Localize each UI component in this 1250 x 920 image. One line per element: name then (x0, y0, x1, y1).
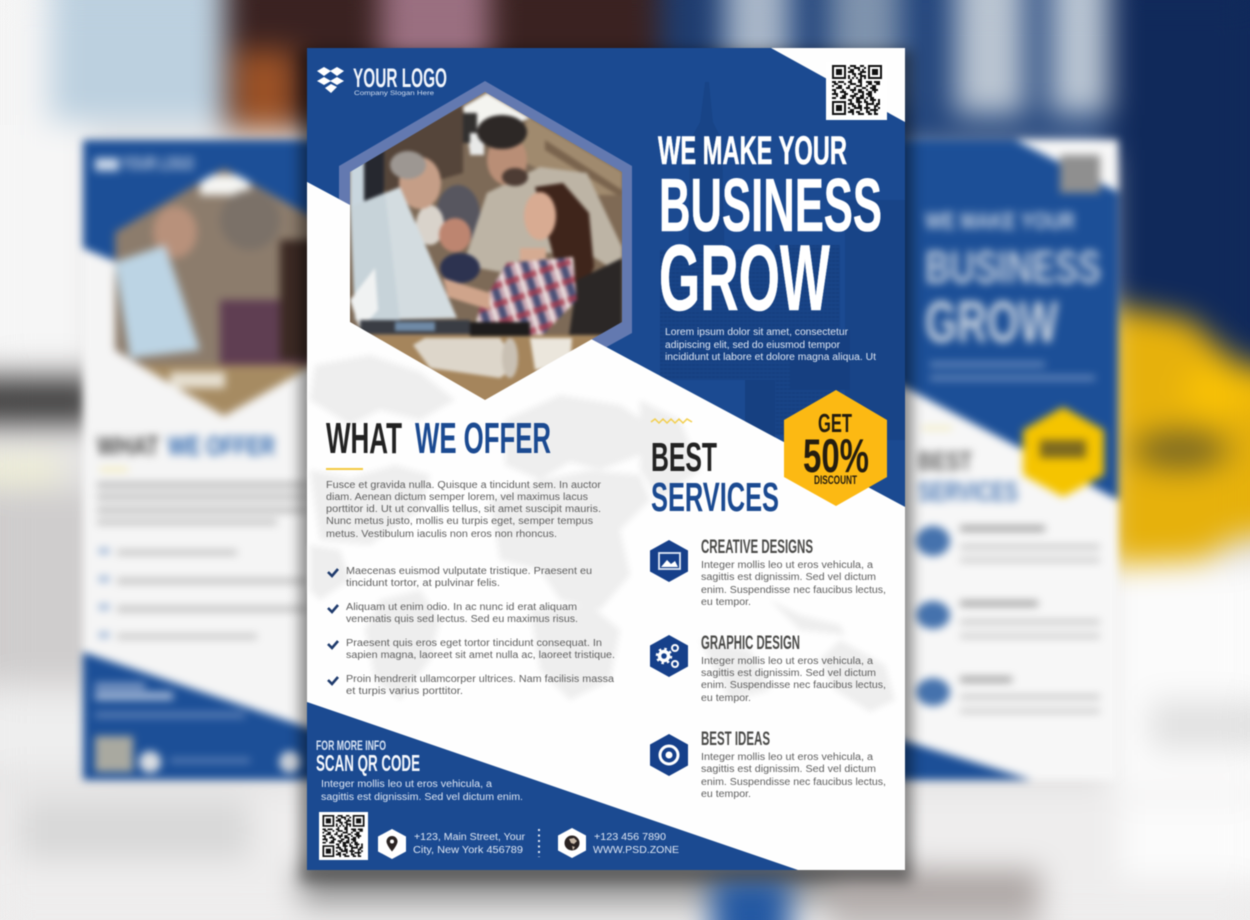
scan QR text: sagittis est dignissim. Sed vel dictum enim. (321, 792, 523, 803)
list item 3: Praesent quis eros eget tortor tincidunt consequat. In (346, 638, 602, 649)
service title: GRAPHIC DESIGN (701, 633, 800, 654)
discount badge (784, 390, 887, 506)
service: best ideas (650, 729, 886, 800)
right blurred flyer: BEST (918, 446, 972, 476)
right blurred flyer: GROW (925, 290, 1058, 355)
service text (701, 560, 886, 608)
headline: BUSINESS (659, 163, 882, 247)
scan QR text: Integer mollis leo ut eros vehicula, a (321, 779, 492, 790)
icon: location pin (378, 829, 406, 859)
list item 3: sapien magna, laoreet sit amet nulla ac, laoreet tristique. (346, 650, 615, 661)
logo slogan: Company Slogan Here (354, 90, 434, 97)
icon: logo box (317, 67, 344, 93)
world map background (310, 355, 895, 712)
bottom blue panel (307, 702, 798, 870)
phone and website (593, 832, 679, 856)
logo (317, 63, 447, 97)
intro paragraph: adipiscing elit, sed do eiusmod tempor (665, 340, 841, 351)
flyer base sheet (307, 48, 905, 870)
address (413, 832, 526, 856)
icon: ring (650, 734, 688, 776)
list item 1: Maecenas euismod vulputate tristique. Praesent eu (346, 566, 592, 577)
white lower panel (307, 182, 905, 870)
service: graphic design (650, 633, 886, 704)
headline: GROW (659, 225, 830, 330)
what we offer paragraph: porttitor id. Ut ut convallis tellus, sit amet suscipit mauris. (326, 504, 601, 515)
intro paragraph: incididunt ut labore et dolore magna aliqua. Ut (665, 352, 876, 363)
bottom QR code (319, 812, 368, 860)
top QR code (826, 62, 887, 120)
contact divider dots (538, 829, 540, 857)
address: +123, Main Street, Your (414, 832, 526, 843)
intro paragraph (665, 327, 876, 363)
service text: eu tempor. (701, 597, 751, 608)
what we offer paragraph (326, 480, 602, 540)
address: City, New York 456789 (413, 845, 523, 856)
scan QR heading: SCAN QR CODE (316, 750, 420, 776)
main flyer (307, 48, 905, 870)
phone and website: +123 456 7890 (594, 832, 666, 843)
list item 2: venenatis quis sed lectus. Sed eu maximus risus. (346, 614, 578, 625)
left blurred flyer: YOUR LOGO (122, 154, 194, 175)
service text: Integer mollis leo ut eros vehicula, a (701, 560, 873, 571)
scan QR heading (316, 737, 420, 776)
headline (658, 129, 882, 330)
intro paragraph: Lorem ipsum dolor sit amet, consectetur (665, 327, 849, 338)
phone and website: WWW.PSD.ZONE (593, 845, 679, 856)
headline: WE MAKE YOUR (658, 129, 847, 173)
discount badge: DISCOUNT (814, 473, 857, 487)
check list (328, 566, 615, 697)
list item 1 (328, 566, 592, 589)
best services heading: SERVICES (651, 474, 779, 520)
what we offer paragraph: metus. Vestibulum iaculis non eros non rhoncus. (326, 529, 557, 540)
what we offer paragraph: diam. Aenean dictum semper lorem, vel maximus lacus (326, 492, 588, 503)
service: creative designs (650, 537, 886, 608)
list item 4: et turpis varius porttitor. (346, 686, 463, 697)
icon: globe (558, 828, 586, 858)
service text: sagittis est dignissim. Sed vel dictum (701, 764, 876, 775)
scan QR heading: FOR MORE INFO (316, 737, 386, 753)
icon: picture (650, 540, 688, 582)
service text: eu tempor. (701, 789, 751, 800)
city skyline texture (660, 82, 905, 450)
list item 4 (328, 674, 614, 697)
right blurred flyer (895, 140, 1118, 780)
scan QR text (321, 779, 523, 803)
blue top panel (307, 48, 905, 507)
right blurred flyer: WE MAKE YOUR (925, 208, 1075, 235)
left blurred flyer: WHAT (97, 431, 159, 461)
what we offer paragraph: Fusce et gravida nulla. Quisque a tincidunt sem. In auctor (326, 480, 602, 491)
left blurred flyer: WE OFFER (168, 431, 275, 461)
main flyer shadow (300, 50, 912, 882)
service text: Integer mollis leo ut eros vehicula, a (701, 656, 873, 667)
best services heading (651, 419, 779, 520)
service text (701, 752, 886, 800)
service text: sagittis est dignissim. Sed vel dictum (701, 572, 876, 583)
logo name: YOUR LOGO (353, 63, 447, 93)
left blurred flyer (83, 140, 345, 780)
what we offer heading: WE OFFER (415, 414, 551, 463)
what we offer heading (326, 414, 551, 470)
list item 2 (328, 602, 578, 625)
what we offer paragraph: Nunc metus justo, mollis eu turpis eget, semper tempus (326, 516, 593, 527)
service text: sagittis est dignissim. Sed vel dictum (701, 668, 876, 679)
right blurred flyer: BUSINESS (925, 241, 1101, 293)
service text: enim. Suspendisse nec faucibus lectus, (701, 777, 886, 788)
service text: Integer mollis leo ut eros vehicula, a (701, 752, 873, 763)
list item 2: Aliquam ut enim odio. In ac nunc id erat aliquam (346, 602, 577, 613)
photo hexagon frame (339, 81, 632, 414)
service title: CREATIVE DESIGNS (701, 537, 813, 558)
service text: enim. Suspendisse nec faucibus lectus, (701, 680, 886, 691)
discount badge: 50% (803, 429, 869, 482)
icon: gears (650, 635, 688, 677)
right blurred flyer: SERVICES (918, 476, 1018, 507)
service text: eu tempor. (701, 693, 751, 704)
service text: enim. Suspendisse nec faucibus lectus, (701, 585, 886, 596)
discount badge: GET (818, 408, 852, 438)
list item 1: tincidunt tortor, at pulvinar felis. (346, 578, 500, 589)
service title: BEST IDEAS (701, 729, 770, 750)
service text (701, 656, 886, 704)
best services heading: BEST (651, 434, 717, 480)
what we offer heading: WHAT (326, 414, 402, 463)
team photo hexagon (345, 85, 630, 405)
list item 3 (328, 638, 615, 661)
list item 4: Proin hendrerit ullamcorper ultrices. Nam facilisis massa (346, 674, 614, 685)
